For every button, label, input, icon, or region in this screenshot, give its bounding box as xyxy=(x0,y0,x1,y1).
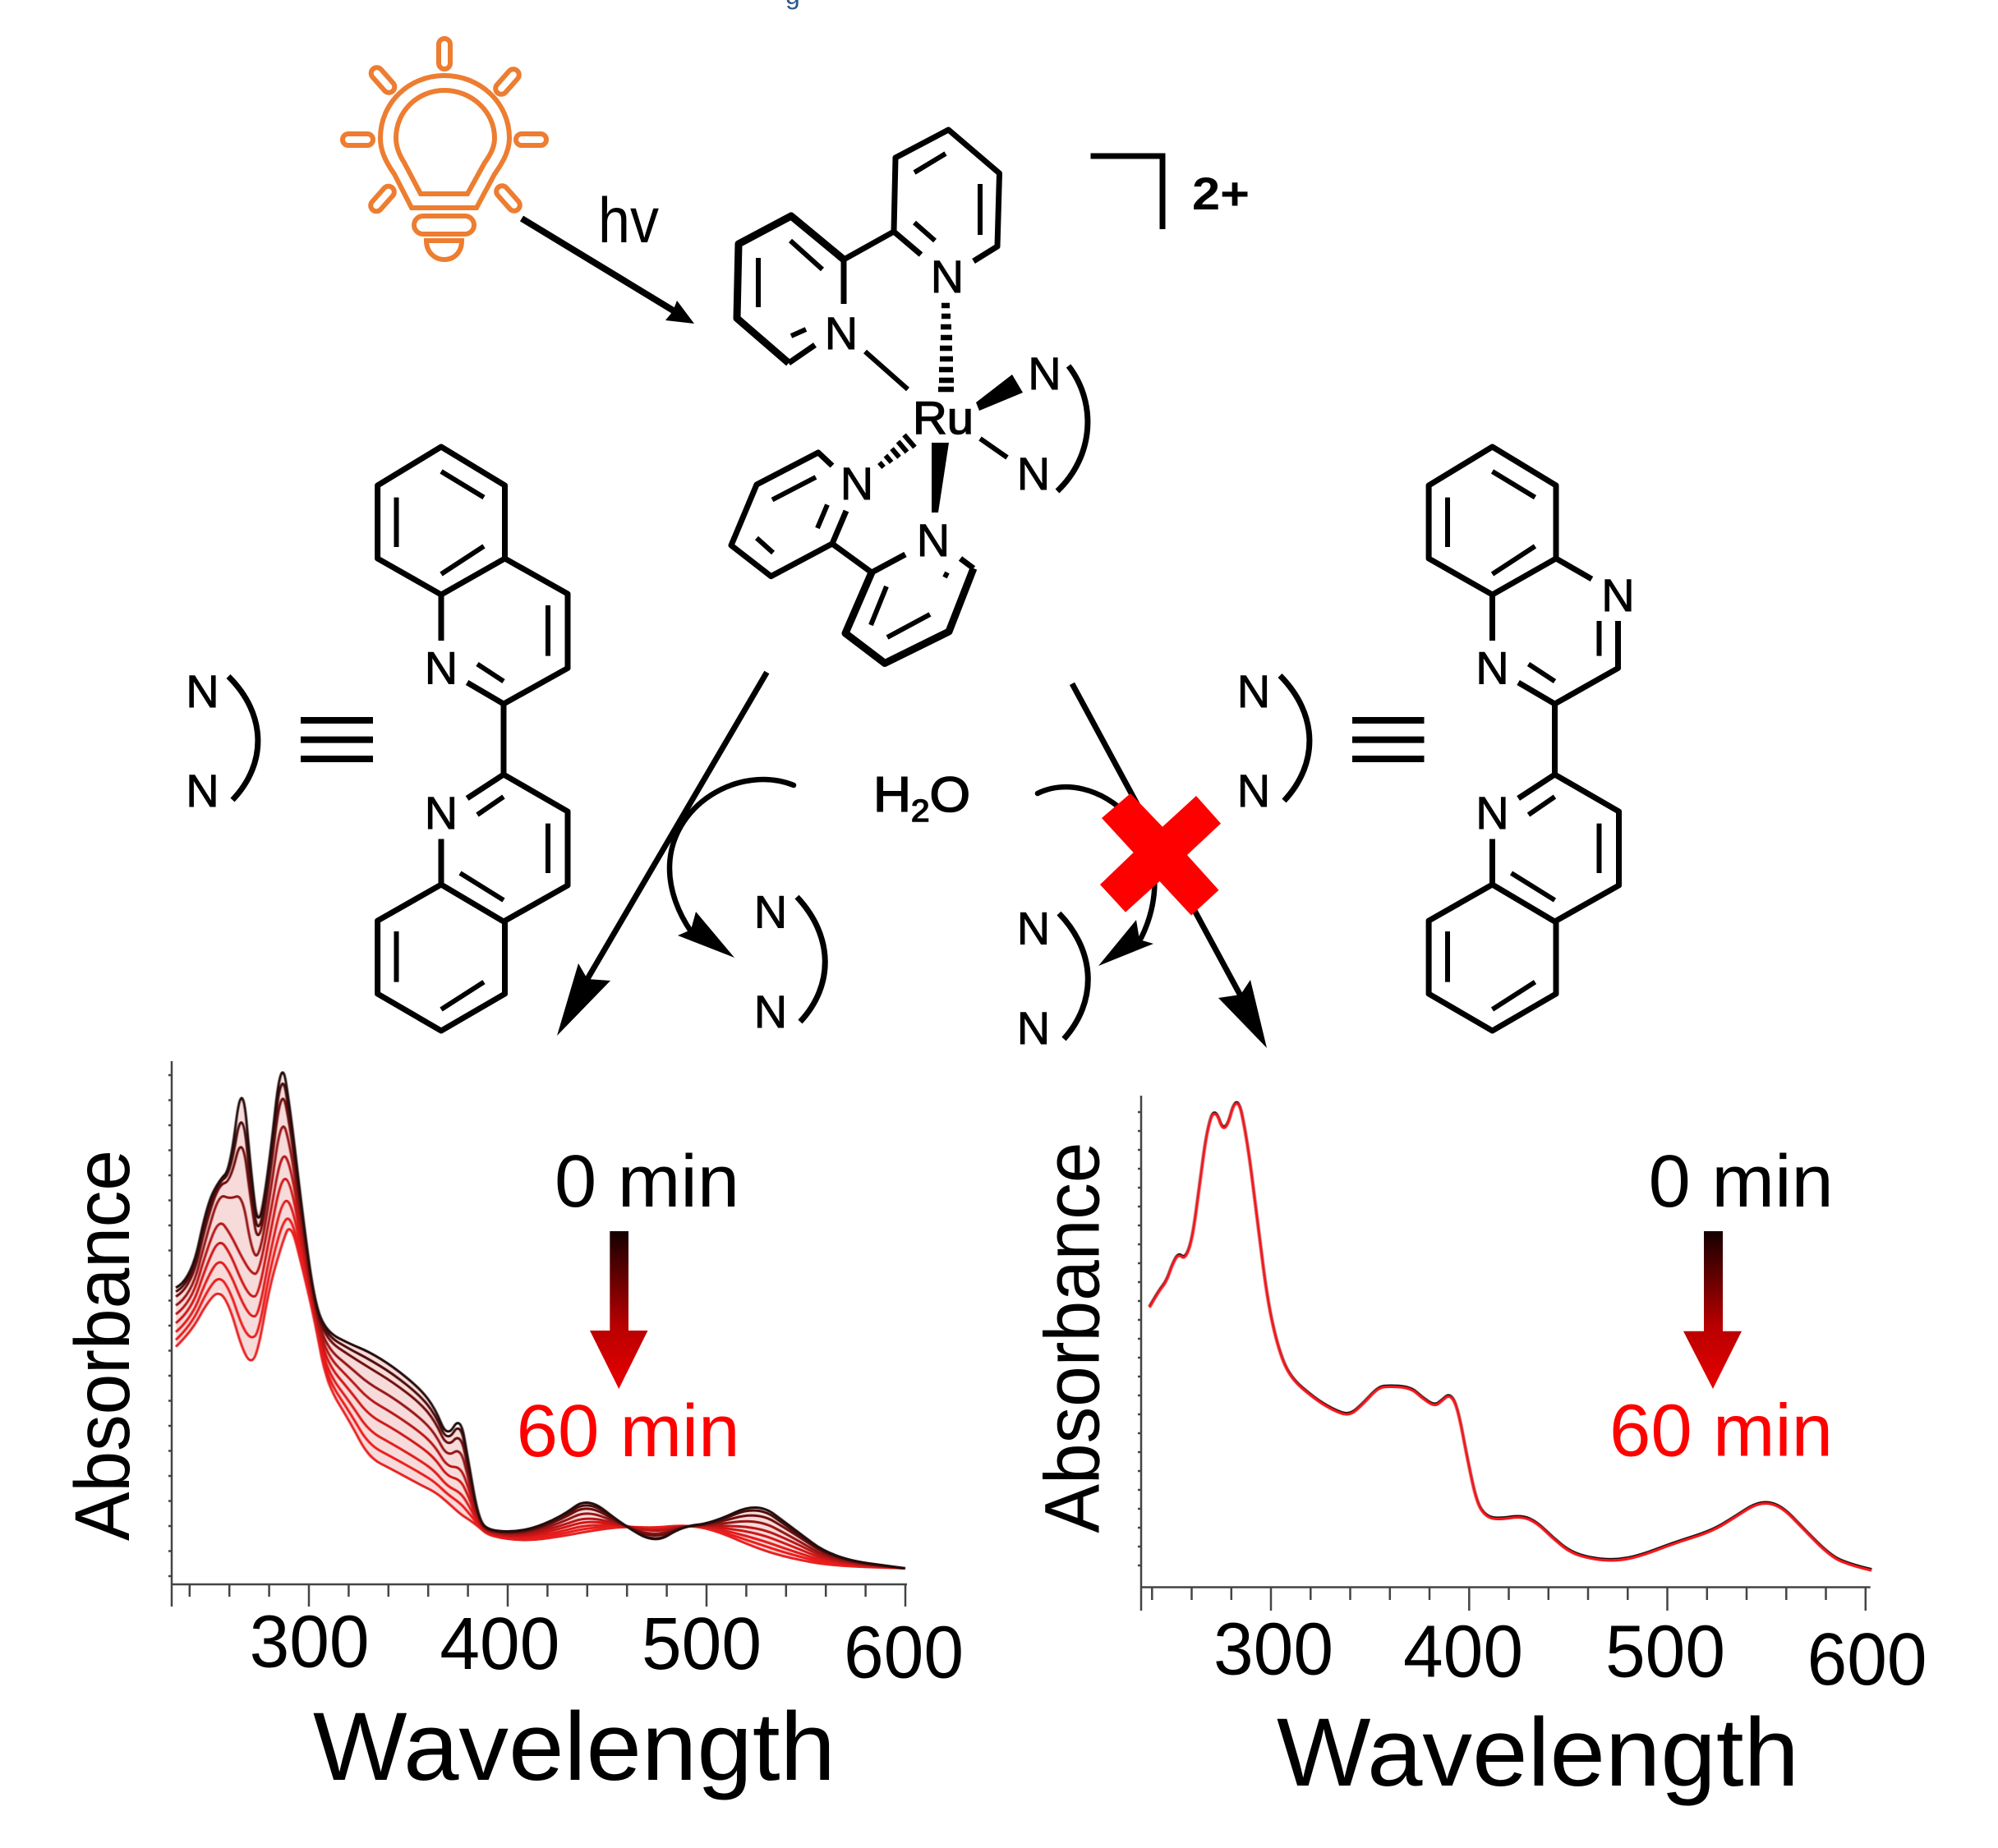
N-N ligand shorthand, left: N xyxy=(186,665,219,717)
N-N chelate ligand on complex xyxy=(1017,347,1088,499)
label: water: O xyxy=(929,767,970,822)
ruthenium centre label: Ru xyxy=(913,392,974,444)
charge label 2+: 2+ xyxy=(1192,168,1250,219)
right x tick labels: 400 xyxy=(1403,1611,1523,1694)
right x tick labels: 300 xyxy=(1213,1609,1333,1691)
right x axis title: Wavelength xyxy=(1277,1699,1799,1807)
biquinoline structure: N xyxy=(425,787,458,839)
icon: light bulb xyxy=(343,39,546,260)
bipyridine ligand, bottom: N xyxy=(917,514,950,566)
label: water: H xyxy=(873,767,909,822)
left time arrow xyxy=(590,1231,647,1389)
right x tick labels: 600 xyxy=(1807,1619,1927,1701)
right time label 0 min: 0 min xyxy=(1649,1141,1834,1223)
N-N ligand shorthand, right: N xyxy=(1237,665,1270,717)
red cross: reaction blocked xyxy=(1100,793,1221,915)
bipyridine ligand, top xyxy=(737,130,999,363)
quinoxaline-quinoline structure xyxy=(1429,447,1635,1031)
unreleased ligand, right: N xyxy=(1017,1002,1050,1054)
chart: right absorbance spectra xyxy=(1029,1096,1927,1807)
bipyridine ligand, top: N xyxy=(931,251,964,302)
N-N ligand shorthand, left: N xyxy=(186,765,219,816)
left x tick labels xyxy=(250,1601,964,1694)
label: water: 2 xyxy=(911,794,929,829)
right x tick labels: 500 xyxy=(1605,1611,1725,1694)
left y axis title: Absorbance xyxy=(59,1150,146,1541)
biquinoline structure: N xyxy=(425,642,458,693)
left x tick labels: 400 xyxy=(440,1603,559,1685)
N-N chelate ligand on complex: N xyxy=(1017,448,1050,499)
right x tick labels xyxy=(1213,1609,1927,1701)
left axes and ticks xyxy=(168,1061,907,1607)
left x axis title: Wavelength xyxy=(313,1693,836,1801)
left time label 0 min: 0 min xyxy=(555,1141,739,1223)
chart: left absorbance spectra xyxy=(59,1061,964,1801)
left x tick labels: 600 xyxy=(844,1612,964,1694)
right spectral traces, 0 to 60 min xyxy=(1149,1102,1871,1570)
N-N ligand shorthand, right: N xyxy=(1237,765,1270,816)
equivalence sign, right xyxy=(1352,720,1425,759)
label: hv: hv xyxy=(598,184,659,256)
arrow: reaction to right spectrum xyxy=(1072,683,1267,1048)
left spectral traces, 0 to 60 min xyxy=(176,1073,905,1568)
left time label 60 min: 60 min xyxy=(517,1391,740,1473)
ruthenium complex structure xyxy=(731,130,1088,664)
N-N chelate ligand on complex: N xyxy=(1028,347,1061,399)
quinoxaline-quinoline structure: N xyxy=(1601,569,1635,621)
quinoxaline-quinoline structure: N xyxy=(1475,787,1509,839)
N-N ligand shorthand, left xyxy=(186,665,258,816)
bipyridine ligand, bottom: N xyxy=(840,457,873,509)
bipyridine ligand, bottom xyxy=(731,453,974,664)
N-N ligand shorthand, right xyxy=(1237,665,1310,816)
equivalence sign, left xyxy=(301,720,373,759)
right axes and ticks xyxy=(1138,1096,1871,1611)
curved arrow: blocked ligand release, right xyxy=(1038,787,1154,966)
biquinoline structure xyxy=(378,447,568,1031)
left x tick labels: 300 xyxy=(250,1601,370,1683)
released ligand, left: N xyxy=(754,886,787,938)
released ligand, left xyxy=(754,886,825,1037)
right time arrow xyxy=(1683,1231,1742,1389)
unreleased ligand, right: N xyxy=(1017,902,1050,954)
right time label 60 min: 60 min xyxy=(1609,1390,1833,1472)
unreleased ligand, right xyxy=(1017,902,1088,1054)
coordination bonds xyxy=(865,306,1023,513)
right y axis title: Absorbance xyxy=(1029,1142,1116,1533)
released ligand, left: N xyxy=(754,986,787,1037)
charge bracket xyxy=(1091,156,1162,229)
arrow: light to complex xyxy=(522,218,694,324)
left x tick labels: 500 xyxy=(642,1603,762,1685)
arrow: reaction to left spectrum xyxy=(557,672,767,1036)
bipyridine ligand, top: N xyxy=(825,307,858,359)
curved arrow: ligand release, left xyxy=(670,779,794,958)
quinoxaline-quinoline structure: N xyxy=(1475,642,1509,693)
